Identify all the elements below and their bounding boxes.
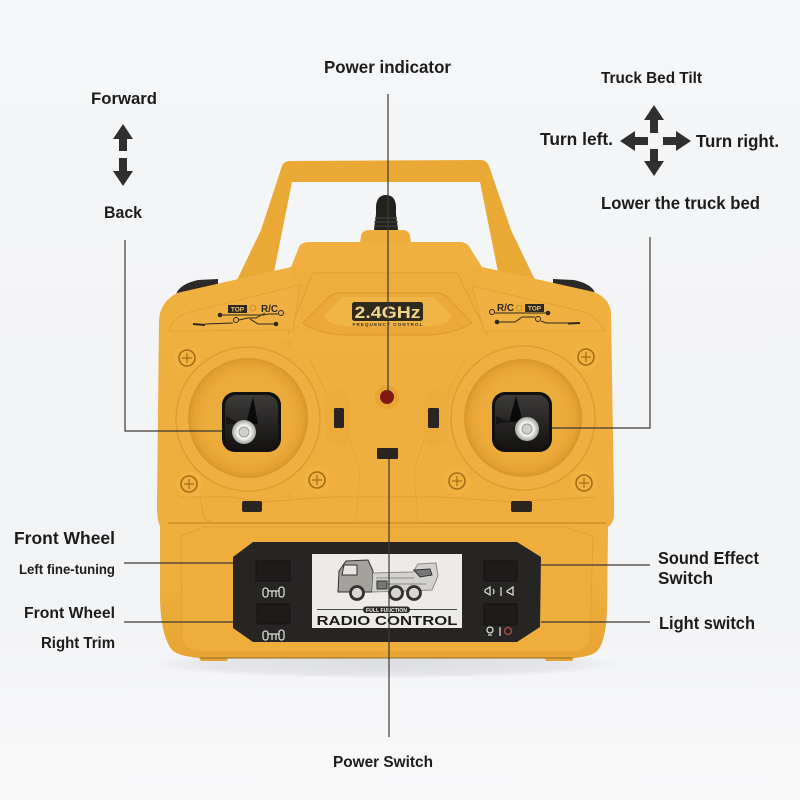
right shoulder panel — [472, 286, 604, 331]
text: R/C: R/C — [261, 303, 278, 315]
LCD screen — [312, 554, 462, 628]
text: full function: FULL FUNCTION — [366, 608, 407, 614]
label: Front Wheel right: Front Wheel — [24, 605, 115, 622]
icon: four-way arrows — [620, 105, 691, 176]
small switches — [242, 408, 532, 512]
label: Power indicator: Power indicator — [324, 57, 451, 77]
centre column — [310, 360, 464, 522]
text: R/C: R/C — [497, 302, 514, 314]
label: Forward: Forward — [91, 90, 157, 108]
label: Right Trim: Right Trim — [41, 635, 115, 652]
text: TOP: TOP — [528, 306, 542, 312]
button icons — [263, 587, 513, 640]
label: Sound Effect: Sound Effect — [658, 548, 759, 568]
truck drawing — [338, 560, 438, 600]
side switch recesses — [324, 388, 350, 447]
icon: up and down arrows — [113, 124, 133, 186]
label: Front Wheel left: Front Wheel — [14, 528, 115, 548]
label: Switch: Switch — [658, 568, 713, 588]
antenna — [360, 195, 411, 243]
main body — [157, 242, 614, 661]
black control panel — [233, 542, 541, 642]
top centre badge — [288, 268, 488, 335]
label: Left fine-tuning: Left fine-tuning — [19, 561, 115, 577]
leader lines — [124, 94, 650, 737]
text: 2.4GHz: 2.4GHz — [354, 304, 420, 322]
text: radio control: RADIO CONTROL — [316, 614, 458, 628]
carrying handle — [237, 160, 536, 282]
label: Lower the truck bed: Lower the truck bed — [601, 193, 760, 213]
left shoulder panel — [169, 285, 300, 331]
label: Power Switch: Power Switch — [333, 754, 433, 771]
remote controller — [157, 160, 614, 661]
text: TOP: TOP — [231, 306, 245, 314]
label: Back: Back — [104, 204, 143, 222]
ground shadow — [156, 650, 616, 678]
text: frequency control: FREQUENCY CONTROL — [352, 322, 423, 328]
screws — [174, 344, 599, 497]
label: Turn left.: Turn left. — [540, 129, 613, 149]
label: Truck Bed Tilt: Truck Bed Tilt — [601, 70, 702, 87]
power indicator LED — [375, 385, 399, 409]
shoulder buttons — [176, 279, 218, 294]
lower panel — [181, 527, 593, 652]
label: Light switch: Light switch — [659, 613, 755, 633]
label: Turn right.: Turn right. — [696, 131, 779, 151]
right stick housing — [451, 346, 595, 490]
trim buttons — [256, 561, 517, 625]
left stick housing — [176, 342, 320, 498]
